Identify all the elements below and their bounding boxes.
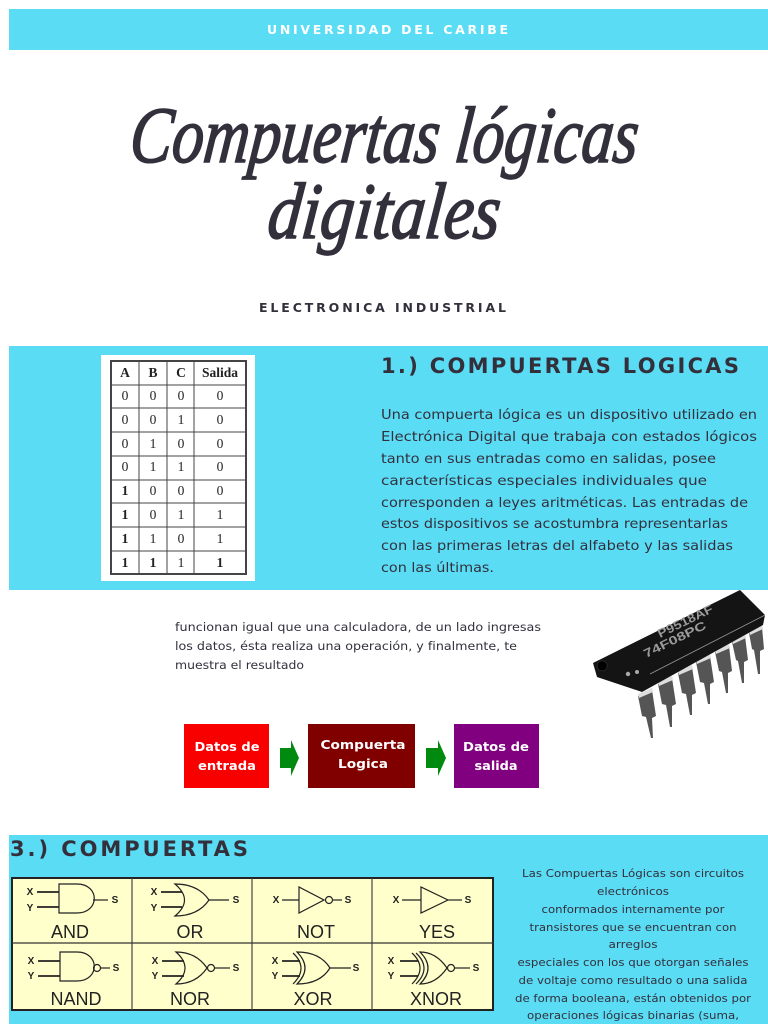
truth table: 1 xyxy=(178,412,184,427)
truth table: 0 xyxy=(217,436,224,451)
calculator explanation text: los datos, ésta realiza una operación, y finalmente, te xyxy=(175,639,517,653)
truth table: 0 xyxy=(150,412,157,427)
truth table: 0 xyxy=(217,459,224,474)
truth table: Salida xyxy=(202,365,238,380)
truth table: B xyxy=(148,365,158,380)
gate: NAND: S xyxy=(113,963,120,974)
header band xyxy=(9,9,768,50)
section 3 paragraph: Las Compuertas Lógicas son circuitos xyxy=(522,867,744,880)
title: Compuertas lógicas xyxy=(126,92,643,180)
gate: NOT: NOT xyxy=(297,922,335,942)
section 1 paragraph: Electrónica Digital que trabaja con estados lógicos xyxy=(381,429,757,445)
truth table: 0 xyxy=(217,388,224,403)
box: logic gate xyxy=(308,724,415,788)
calculator explanation text xyxy=(175,620,541,672)
section 1 paragraph: con las primeras letras del alfabeto y las salidas xyxy=(381,538,733,554)
truth table: 1 xyxy=(150,459,156,474)
box: data output xyxy=(454,724,539,788)
truth table: 1 xyxy=(217,531,223,546)
section 1 paragraph: corresponden a leyes aritméticas. Las entradas de xyxy=(381,495,748,511)
truth table: 0 xyxy=(122,388,129,403)
box: data input: entrada xyxy=(198,759,256,773)
box: data output: Datos de xyxy=(463,740,529,754)
gate: XNOR: Y xyxy=(388,971,395,982)
gate: NAND: NAND xyxy=(50,989,102,1009)
section 3 paragraph: operaciones lógicas binarias (suma, xyxy=(527,1009,739,1022)
truth table: 0 xyxy=(178,436,185,451)
section 3 paragraph xyxy=(515,867,752,1022)
gate: AND: S xyxy=(112,895,119,906)
flow diagram xyxy=(184,724,539,788)
arrow: gate to output xyxy=(426,740,446,776)
gate: YES: S xyxy=(465,895,472,906)
icon: integrated circuit chip: 74F08PC xyxy=(641,618,709,661)
gate: AND xyxy=(27,884,119,942)
truth table: 0 xyxy=(122,459,129,474)
gate: NOR: X xyxy=(152,956,159,967)
section 1 heading: 1.) COMPUERTAS LOGICAS xyxy=(381,354,739,378)
title xyxy=(126,92,643,256)
gate: NOR xyxy=(152,952,240,1009)
logic gates table xyxy=(12,878,493,1010)
truth table: 1 xyxy=(150,531,156,546)
truth table: 0 xyxy=(122,436,129,451)
calculator explanation text: muestra el resultado xyxy=(175,658,304,672)
section 3 paragraph: arreglos xyxy=(608,938,658,951)
section 1 paragraph: características especiales individuales que xyxy=(381,473,707,489)
title: digitales xyxy=(264,168,505,256)
gate: NAND xyxy=(28,952,120,1009)
section 1 paragraph: tanto en sus entradas como en salidas, posee xyxy=(381,451,716,467)
box: logic gate: Logica xyxy=(338,757,388,771)
truth table xyxy=(101,355,255,581)
gate: XOR: Y xyxy=(272,971,279,982)
pin highlights xyxy=(638,625,763,698)
truth table: 0 xyxy=(178,483,185,498)
truth table: 1 xyxy=(178,459,184,474)
box: data input xyxy=(184,724,269,788)
gate: NOT: X xyxy=(273,895,280,906)
chip pins xyxy=(638,627,764,738)
header band: UNIVERSIDAD DEL CARIBE xyxy=(267,22,508,37)
section 3 paragraph: electrónicos xyxy=(597,885,669,898)
section 1 paragraph xyxy=(381,407,757,576)
truth table: A xyxy=(120,365,130,380)
gate: XOR: S xyxy=(353,963,360,974)
section 3 paragraph: de forma booleana, están obtenidos por xyxy=(515,992,752,1005)
gate: XOR: X xyxy=(272,956,279,967)
truth table: 1 xyxy=(217,507,223,522)
box: data output: salida xyxy=(474,759,518,773)
truth table: 0 xyxy=(150,388,157,403)
truth table: 1 xyxy=(178,555,184,570)
section 3 paragraph: conformados internamente por xyxy=(542,903,725,916)
gate: OR: Y xyxy=(151,903,158,914)
gate: AND: X xyxy=(27,887,34,898)
gate: NOR: S xyxy=(233,963,240,974)
gate: NOR: NOR xyxy=(170,989,210,1009)
section 3 paragraph: especiales con los que otorgan señales xyxy=(518,956,749,969)
truth table: 0 xyxy=(150,507,157,522)
section 1 paragraph: estos dispositivos se acostumbra representarlas xyxy=(381,516,728,532)
gate: AND: AND xyxy=(51,922,89,942)
gate: XNOR xyxy=(388,952,480,1009)
gate: NOT: S xyxy=(345,895,352,906)
truth table: 0 xyxy=(217,483,224,498)
truth table: 1 xyxy=(122,483,129,498)
gate: YES: YES xyxy=(419,922,455,942)
gate: YES: X xyxy=(393,895,400,906)
truth table: C xyxy=(176,365,186,380)
gate: NOR: Y xyxy=(152,971,159,982)
gate: OR: OR xyxy=(176,922,204,942)
subtitle: ELECTRONICA INDUSTRIAL xyxy=(259,300,506,315)
section 1 paragraph: con las últimas. xyxy=(381,560,494,576)
truth table: 1 xyxy=(150,436,156,451)
gate: OR: X xyxy=(151,887,158,898)
gate: NOT xyxy=(273,887,352,942)
truth table: 0 xyxy=(217,412,224,427)
truth table: 0 xyxy=(150,483,157,498)
box: logic gate: Compuerta xyxy=(320,738,406,752)
gate: XNOR: S xyxy=(473,963,480,974)
truth table: 0 xyxy=(178,531,185,546)
section 3 paragraph: transistores que se encuentran con xyxy=(530,921,737,934)
arrow: input to gate xyxy=(280,740,299,776)
gate: XNOR: XNOR xyxy=(410,989,462,1009)
gate: NAND: Y xyxy=(28,971,35,982)
truth table: 1 xyxy=(150,555,157,570)
truth table: 1 xyxy=(122,555,129,570)
section 1 paragraph: Una compuerta lógica es un dispositivo utilizado en xyxy=(381,407,757,423)
truth table: 1 xyxy=(122,507,129,522)
calculator explanation text: funcionan igual que una calculadora, de un lado ingresas xyxy=(175,620,541,634)
gate: YES xyxy=(393,887,472,942)
gate: OR xyxy=(151,884,240,942)
truth table: 1 xyxy=(122,531,129,546)
truth table: 0 xyxy=(122,412,129,427)
panel: section 3 band xyxy=(9,835,768,1024)
gate: OR: S xyxy=(233,895,240,906)
gate: AND: Y xyxy=(27,903,34,914)
section 3 paragraph: de voltaje como resultado o una salida xyxy=(518,974,748,987)
truth table: 1 xyxy=(217,555,224,570)
truth table: 1 xyxy=(178,507,184,522)
section 3 heading: 3.) COMPUERTAS xyxy=(10,837,248,861)
gate: XOR xyxy=(272,952,360,1009)
icon: integrated circuit chip xyxy=(593,590,765,738)
truth table: 0 xyxy=(178,388,185,403)
gate: XOR: XOR xyxy=(293,989,333,1009)
icon: integrated circuit chip: P9518AF xyxy=(655,602,715,641)
box: data input: Datos de xyxy=(194,740,260,754)
gate: NAND: X xyxy=(28,956,35,967)
gate: XNOR: X xyxy=(388,956,395,967)
panel: section 1 band xyxy=(9,346,768,590)
